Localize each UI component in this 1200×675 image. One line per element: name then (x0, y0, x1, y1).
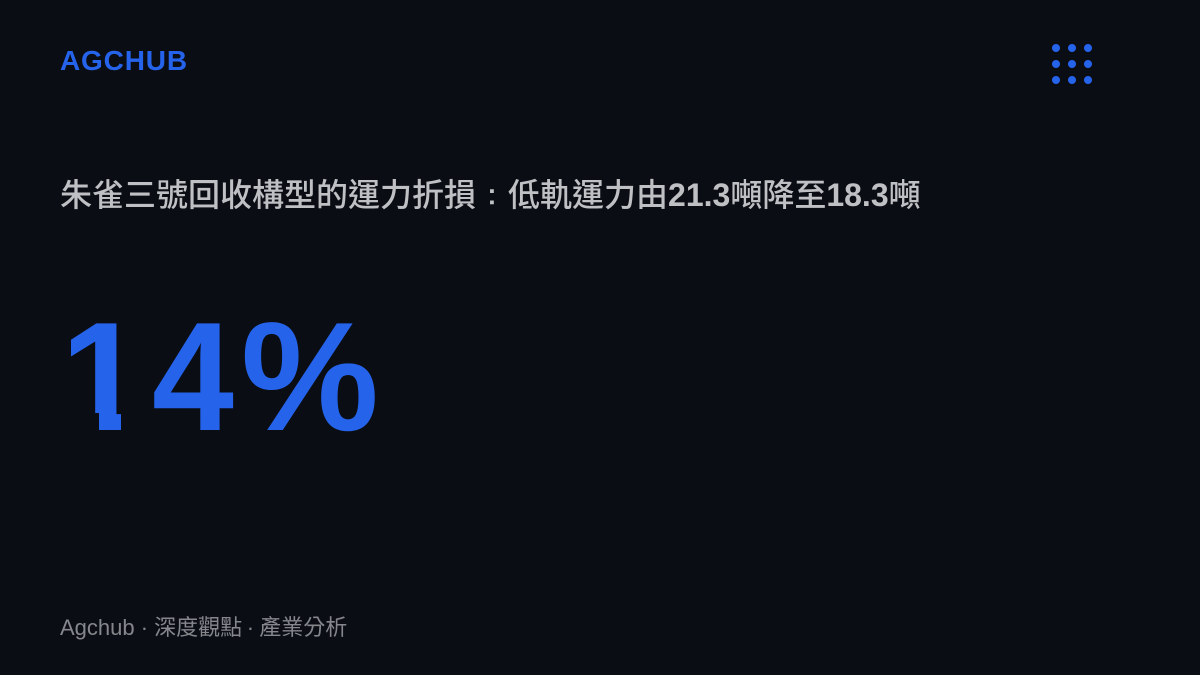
brand logo text: AGCHUB (60, 45, 188, 76)
headline: 朱雀三號回收構型的運力折損：低軌運力由21.3噸降至18.3噸 (60, 177, 921, 213)
big number: 14% (71, 290, 379, 463)
big number: 14%: % (241, 290, 379, 463)
footer text: Agchub · 深度觀點 · 產業分析 (60, 615, 347, 640)
icon: dot grid (1052, 44, 1092, 84)
big number: 14%: 1 (59, 290, 145, 463)
big number: 14%: 4 (152, 290, 234, 463)
